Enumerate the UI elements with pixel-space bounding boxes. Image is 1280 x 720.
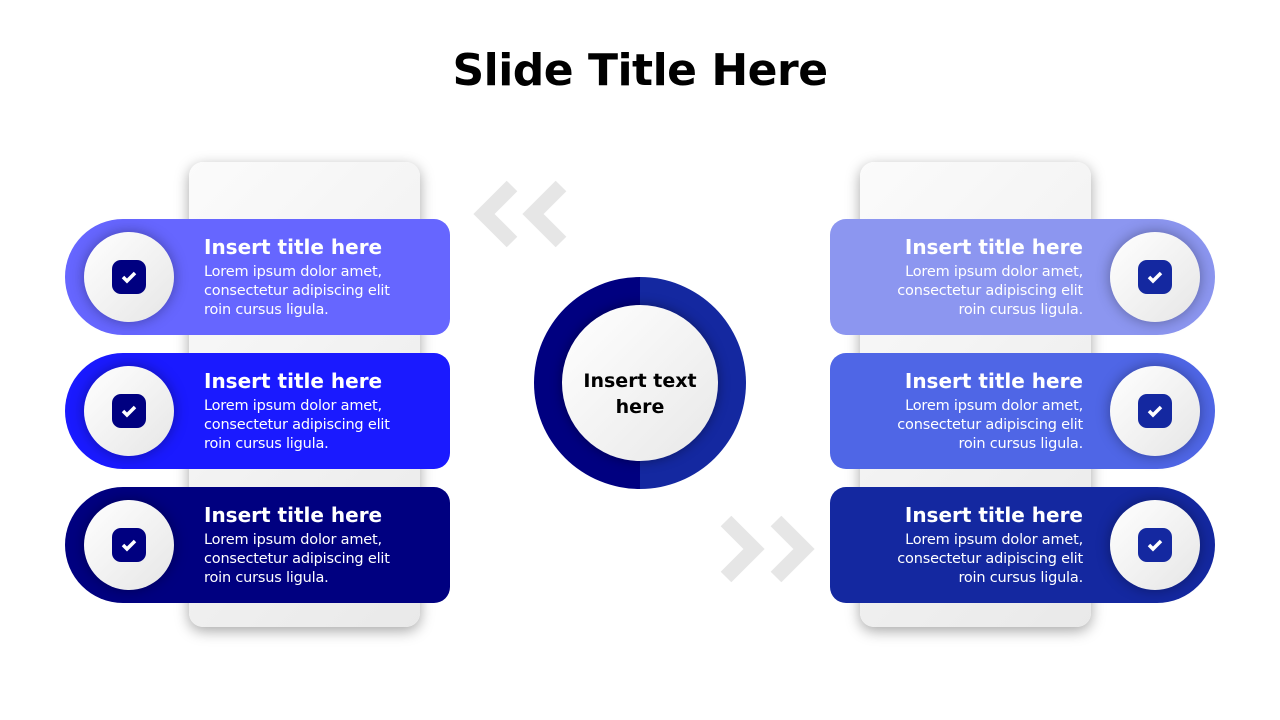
center text circle: Insert text [583, 370, 697, 392]
right item 3: consectetur adipiscing elit [897, 551, 1083, 567]
icon check [84, 366, 174, 456]
right item 2: Lorem ipsum dolor amet, [905, 398, 1083, 414]
left item 1 [65, 219, 450, 335]
left item 1: consectetur adipiscing elit [204, 283, 390, 299]
icon check [1110, 232, 1200, 322]
right item 2: roin cursus ligula. [958, 436, 1083, 452]
right item 2: Insert title here [905, 369, 1083, 393]
left item 2: Insert title here [204, 369, 382, 393]
center text circle [562, 305, 718, 461]
left item 1: Insert title here [204, 235, 382, 259]
center ring [534, 277, 746, 489]
chevrons right [720, 516, 814, 582]
right item 3: Lorem ipsum dolor amet, [905, 532, 1083, 548]
center text circle: here [616, 396, 664, 418]
right item 3: Insert title here [905, 503, 1083, 527]
left item 2: roin cursus ligula. [204, 436, 329, 452]
right item 1: roin cursus ligula. [958, 302, 1083, 318]
right item 1 [830, 219, 1215, 335]
right item 1: Insert title here [905, 235, 1083, 259]
left item 2: Lorem ipsum dolor amet, [204, 398, 382, 414]
left item 3 [65, 487, 450, 603]
icon check [1110, 366, 1200, 456]
icon check [84, 232, 174, 322]
right item 2: consectetur adipiscing elit [897, 417, 1083, 433]
title: Slide Title Here [452, 45, 828, 96]
right item 1: Lorem ipsum dolor amet, [905, 264, 1083, 280]
left item 3: Lorem ipsum dolor amet, [204, 532, 382, 548]
right item 1: consectetur adipiscing elit [897, 283, 1083, 299]
icon check [84, 500, 174, 590]
left item 1: Lorem ipsum dolor amet, [204, 264, 382, 280]
right background card [860, 162, 1091, 627]
left background card [189, 162, 420, 627]
left item 2: consectetur adipiscing elit [204, 417, 390, 433]
right item 3: roin cursus ligula. [958, 570, 1083, 586]
left item 3: roin cursus ligula. [204, 570, 329, 586]
left item 2 [65, 353, 450, 469]
right item 3 [830, 487, 1215, 603]
left item 3: consectetur adipiscing elit [204, 551, 390, 567]
chevrons left [474, 181, 566, 247]
icon check [1110, 500, 1200, 590]
left item 3: Insert title here [204, 503, 382, 527]
left item 1: roin cursus ligula. [204, 302, 329, 318]
right item 2 [830, 353, 1215, 469]
